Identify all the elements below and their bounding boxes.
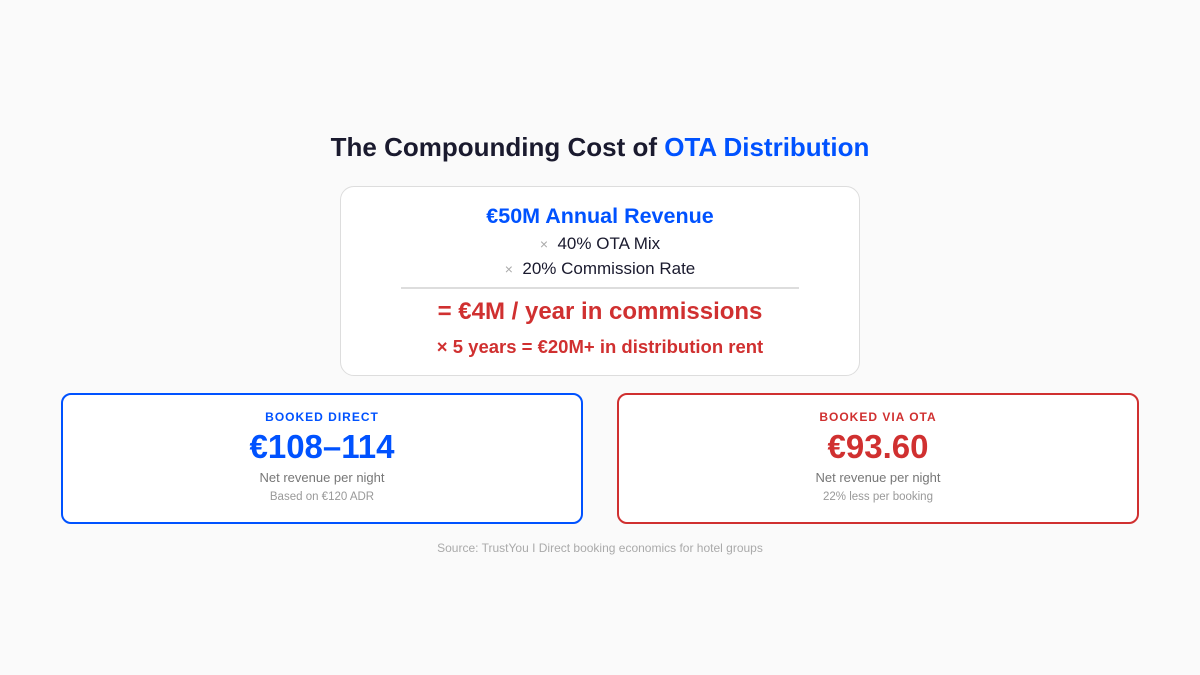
heading: annual revenue: €50M Annual Revenue <box>486 204 714 228</box>
panel: booked direct <box>61 393 583 524</box>
label: BOOKED DIRECT <box>265 410 379 424</box>
panel: booked via OTA <box>617 393 1139 524</box>
value: €93.60 <box>828 428 928 465</box>
text: commission rate: × 20% Commission Rate <box>505 259 695 278</box>
source: Source: TrustYou I Direct booking economics for hotel groups <box>437 541 763 555</box>
label: BOOKED VIA OTA <box>819 410 937 424</box>
panel: calculation <box>340 186 860 376</box>
text: OTA mix: × 40% OTA Mix <box>540 234 660 253</box>
note: 22% less per booking <box>823 491 933 503</box>
title: The Compounding Cost of OTA Distribution <box>331 132 869 162</box>
result: five years: × 5 years = €20M+ in distribution rent <box>437 336 763 357</box>
caption: Net revenue per night <box>815 470 941 485</box>
value: €108–114 <box>249 428 394 465</box>
caption: Net revenue per night <box>259 470 385 485</box>
result: annual commissions: = €4M / year in commissions <box>438 298 762 325</box>
note: Based on €120 ADR <box>270 491 374 503</box>
